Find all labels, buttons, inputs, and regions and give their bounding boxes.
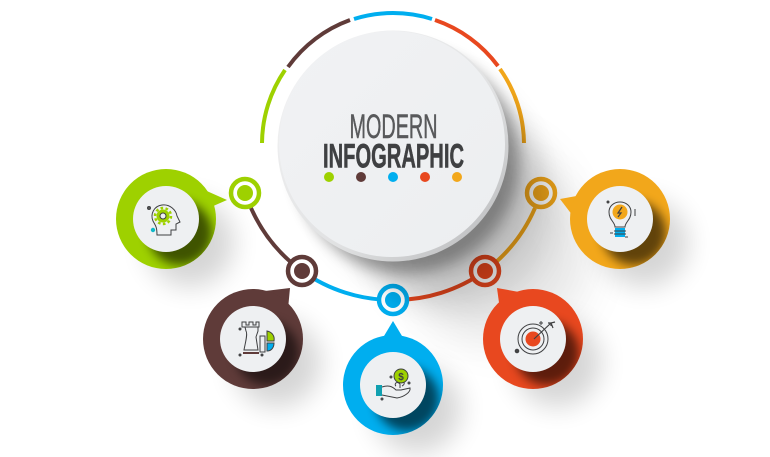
- title: MODERN: [350, 108, 438, 146]
- panel: yellow bubble: [560, 169, 688, 287]
- node: yellow: [527, 179, 555, 207]
- icon: chess rook and pie: [239, 322, 274, 356]
- node: red: [471, 257, 499, 285]
- icon: hand with coin plant: $: [398, 372, 404, 383]
- infographic: [116, 11, 696, 457]
- panel: red bubble: [483, 288, 601, 407]
- icon: head with gear: [148, 205, 180, 235]
- central disc: [278, 30, 508, 262]
- icon: light bulb: [607, 201, 635, 237]
- panel: brown bubble: [203, 288, 321, 407]
- colour dots: [324, 172, 462, 182]
- title: [323, 108, 464, 176]
- upper segmented ring: [262, 13, 524, 143]
- icon: target with arrow: [515, 321, 555, 354]
- lower connecting arc: [251, 208, 535, 300]
- shadow of central disc: [293, 47, 597, 350]
- title: INFOGRAPHIC: [323, 138, 464, 176]
- node: brown: [288, 257, 316, 285]
- panel: blue bubble: [343, 321, 461, 453]
- panel: green bubble: [116, 169, 234, 287]
- node: green: [231, 179, 259, 207]
- node: blue: [379, 286, 407, 314]
